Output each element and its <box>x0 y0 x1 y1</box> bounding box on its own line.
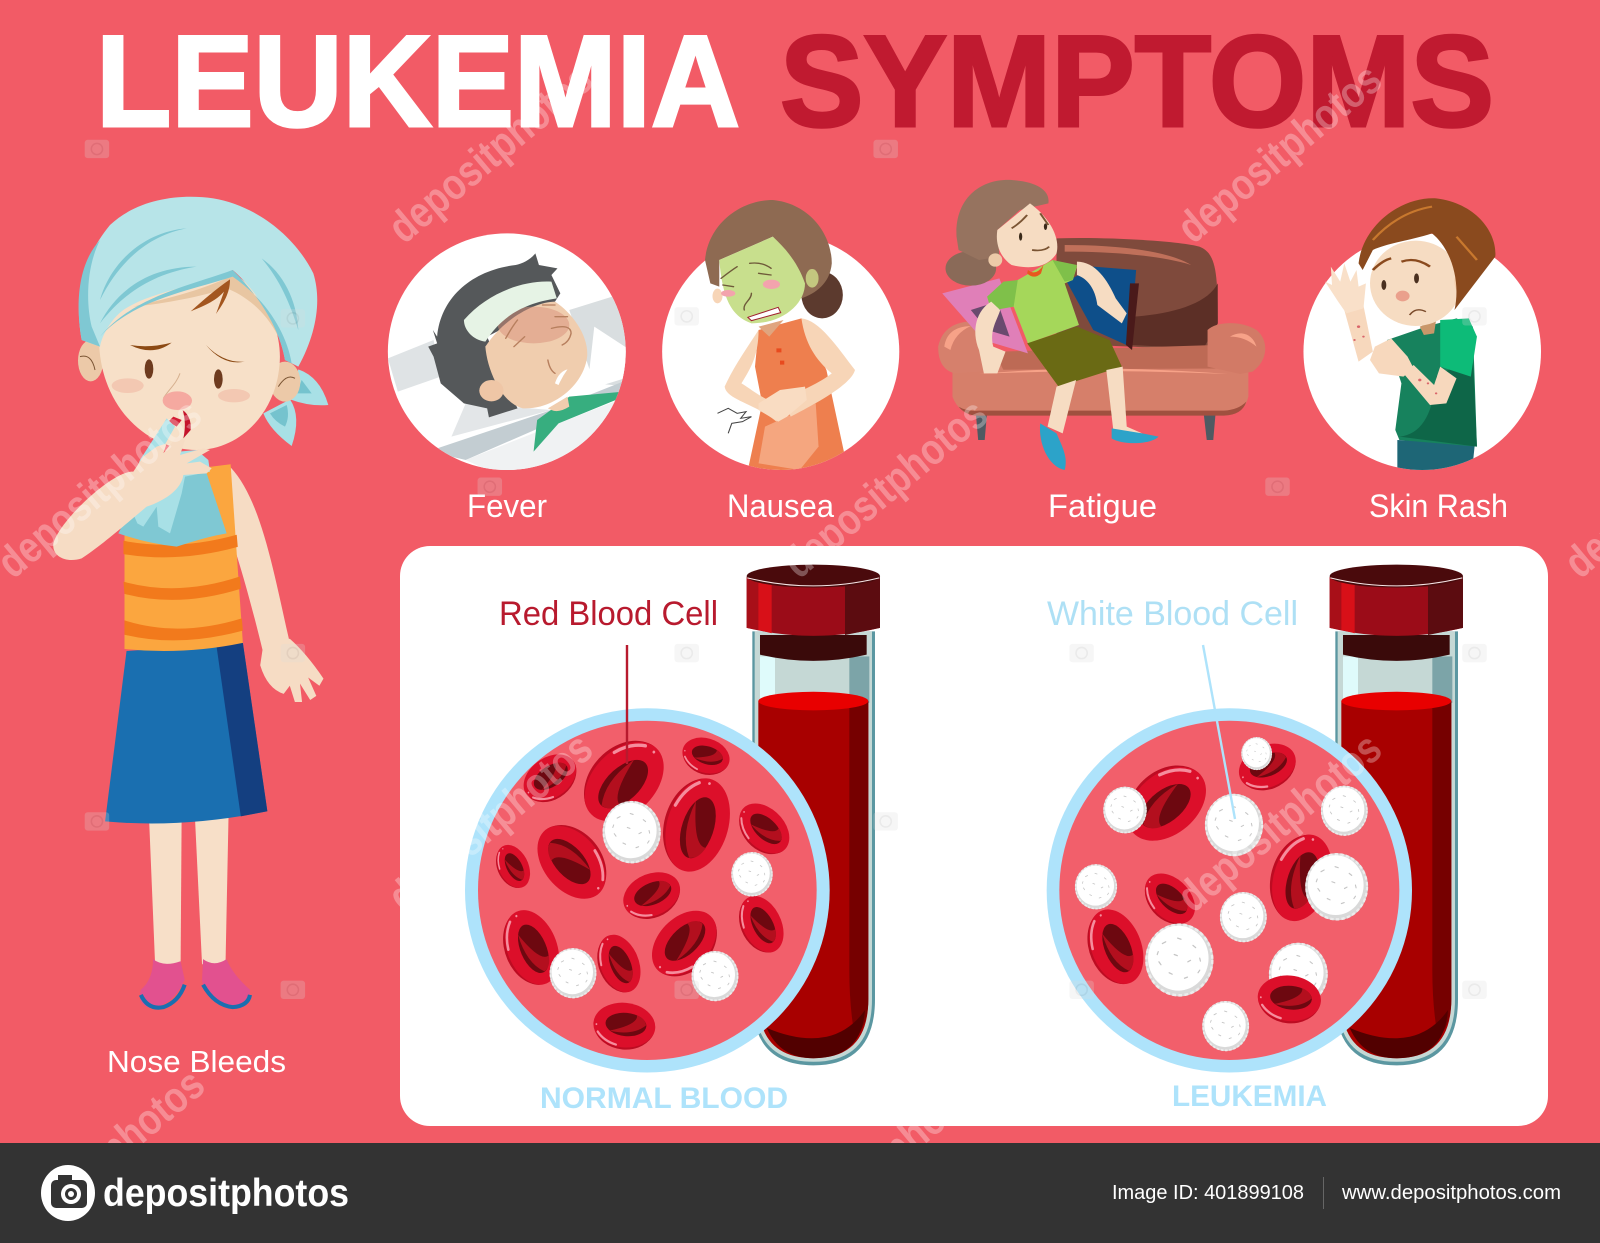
footer logo icon <box>41 1165 95 1221</box>
watermark cameras <box>85 140 1487 999</box>
panel: blood comparison <box>400 546 1548 1126</box>
nausea circle <box>662 200 899 477</box>
girl head and arm <box>53 197 328 560</box>
label: NORMAL BLOOD: NORMAL BLOOD <box>540 1082 788 1115</box>
tube: leukemia <box>1330 565 1463 1065</box>
pointer: red blood cell <box>626 645 628 764</box>
label: Fatigue: Fatigue <box>1048 488 1157 524</box>
label: Fever: Fever <box>467 488 547 524</box>
magnifier: leukemia cells <box>1047 708 1412 1072</box>
girl lower body <box>105 464 323 1008</box>
label: Nausea: Nausea <box>727 488 834 524</box>
watermark text: depositphotos <box>774 389 997 588</box>
divider <box>1323 1177 1324 1209</box>
skin rash: boy in circle <box>1303 198 1541 473</box>
image id: Image ID: 401899108 <box>1112 1182 1304 1204</box>
figure: girl with nose bleed <box>53 197 328 1008</box>
magnifier: normal blood cells <box>465 708 830 1072</box>
watermark text: depositphotos <box>1168 54 1391 253</box>
title: LEUKEMIA <box>96 8 740 154</box>
title: SYMPTOMS <box>780 8 1494 154</box>
icon: fatigue and skin rash <box>938 180 1541 473</box>
label: LEUKEMIA: LEUKEMIA <box>1172 1080 1327 1113</box>
label: Nose Bleeds: Nose Bleeds <box>107 1044 286 1079</box>
label: Skin Rash: Skin Rash <box>1369 488 1508 524</box>
footer bar <box>0 1143 1600 1243</box>
watermark text: depositphotos <box>1168 723 1391 922</box>
website: www.depositphotos.com <box>1341 1182 1561 1204</box>
tube: normal blood <box>747 565 880 1065</box>
label: Red Blood Cell: Red Blood Cell <box>499 595 718 633</box>
pointer: white blood cell <box>1203 645 1235 819</box>
footer logo text: depositphotos <box>103 1172 349 1215</box>
label: White Blood Cell: White Blood Cell <box>1047 595 1298 633</box>
watermark text: depositphotos <box>379 54 602 253</box>
watermark text: depositphotos <box>379 723 602 922</box>
fatigue: sofa and woman <box>938 180 1265 470</box>
icon: fever and nausea circles <box>388 200 899 477</box>
fever circle <box>388 233 630 470</box>
title <box>96 8 1494 154</box>
